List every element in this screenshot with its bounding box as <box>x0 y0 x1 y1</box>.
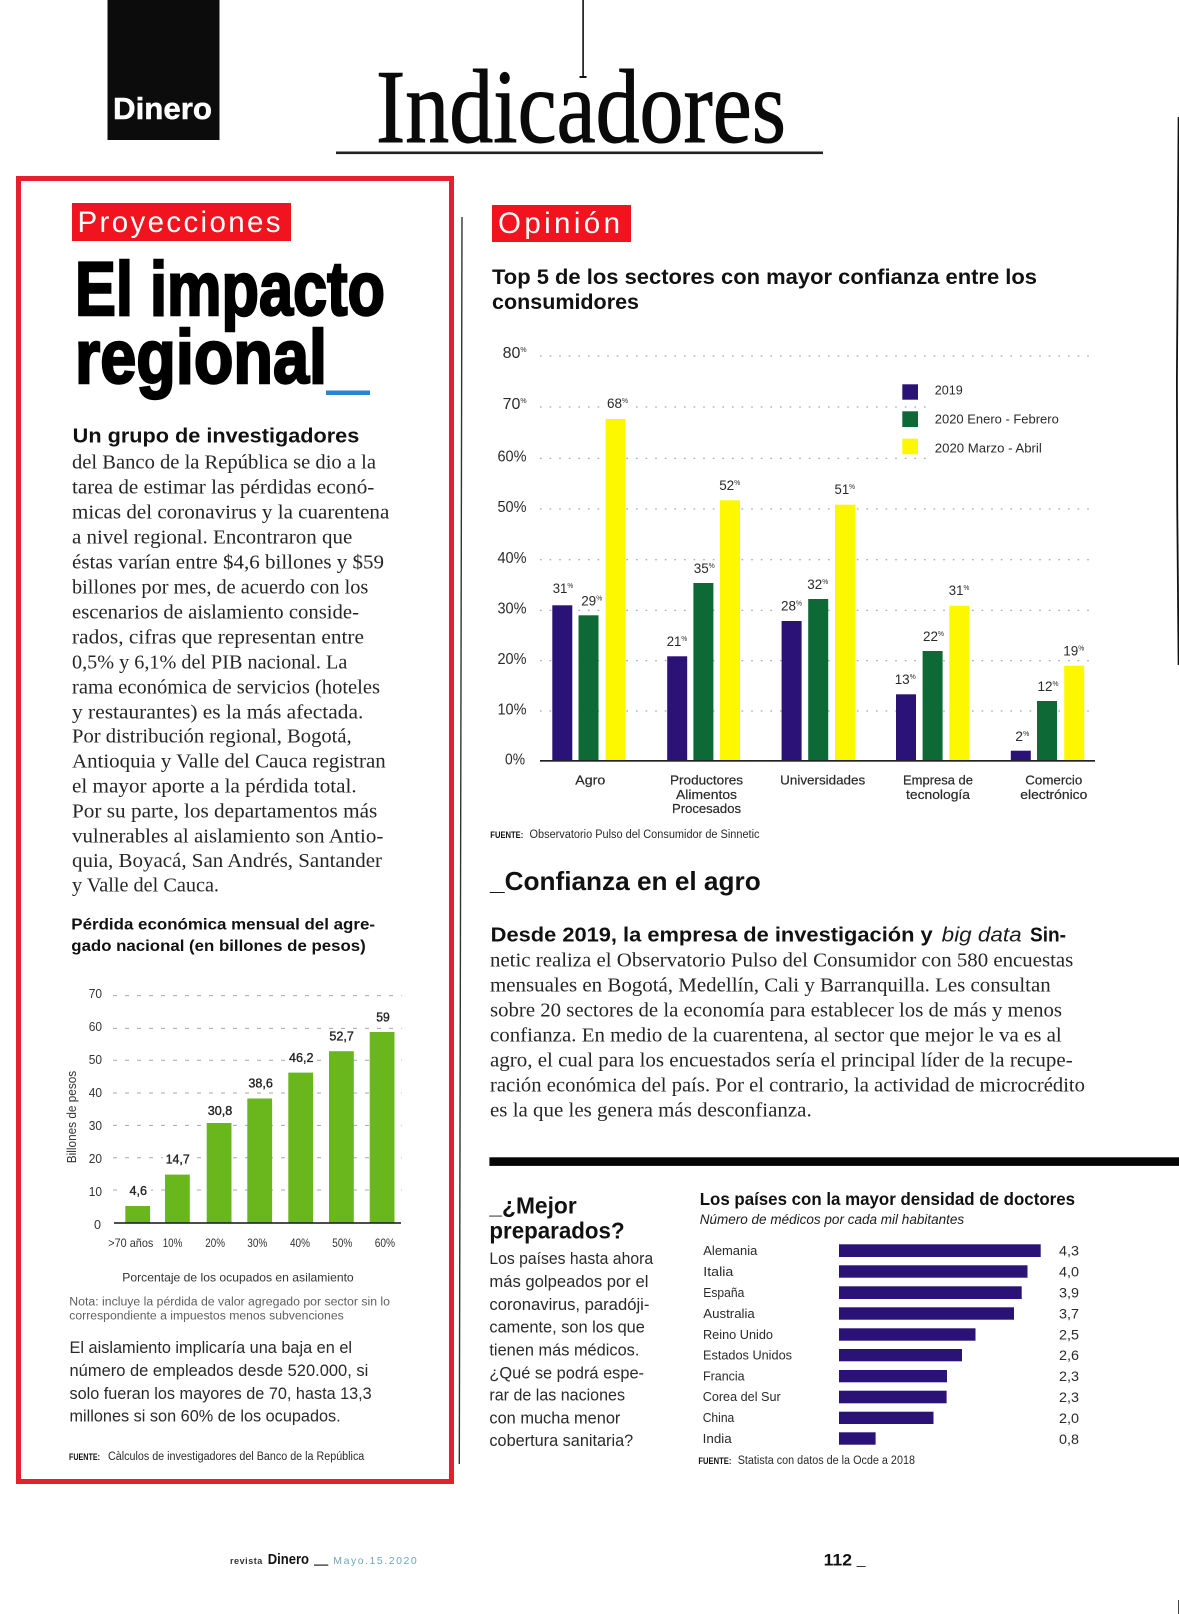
panel: El impacto regional <box>18 178 452 1482</box>
value labels: % <box>1078 646 1084 653</box>
values: 3,9 <box>1059 1284 1079 1300</box>
value labels: 19 <box>1063 643 1079 659</box>
x axis labels: >70 años <box>108 1236 153 1250</box>
bars: 2020 Marzo - Abril <box>606 419 1084 761</box>
page number: 112 <box>824 1551 852 1570</box>
y axis labels <box>89 986 102 1232</box>
body text: Confianza: es la que les genera más desconfianza. <box>490 1101 812 1122</box>
values: 2,6 <box>1059 1347 1079 1363</box>
y axis labels: 10% <box>498 702 526 718</box>
body text: regional losses: micas del coronavirus y la cuarentena <box>72 502 390 523</box>
body text: regional losses: Por distribución regional, Bogotá, <box>72 727 352 748</box>
value labels: 32 <box>807 576 823 592</box>
category labels: electrónico <box>1020 787 1087 802</box>
value labels: 21 <box>667 633 682 649</box>
x axis title: Porcentaje de los ocupados en asilamiento <box>122 1271 354 1285</box>
y axis labels: 20% <box>498 651 526 668</box>
body text: regional losses: rados, cifras que representan entre <box>72 627 364 648</box>
value labels: 2 <box>1015 728 1023 744</box>
value labels: % <box>963 585 969 592</box>
body text: regional losses: tarea de estimar las pérdidas econó- <box>72 477 374 498</box>
y axis labels: 10 <box>89 1184 102 1199</box>
value labels: 46,2 <box>289 1051 314 1065</box>
bar chart: monthly loss <box>65 986 402 1285</box>
value labels: 12 <box>1038 678 1053 694</box>
chart heading: Número de médicos por cada mil habitantes <box>700 1212 964 1227</box>
y axis labels: 80 <box>503 345 520 362</box>
bars: 2019 <box>552 605 1031 761</box>
y axis labels: 60% <box>498 448 526 466</box>
heading: preparados? <box>489 1217 625 1243</box>
value labels: % <box>1052 681 1058 688</box>
value labels: 52,7 <box>329 1030 354 1044</box>
country labels: China <box>703 1410 735 1425</box>
body text <box>489 1250 654 1450</box>
values: 4,3 <box>1059 1242 1079 1258</box>
y axis labels: % <box>520 398 527 405</box>
source: FUENTE: <box>69 1452 100 1462</box>
value labels: 22 <box>923 628 939 644</box>
body text: regional losses: Antioquia y Valle del Cauca registran <box>72 752 386 773</box>
country labels: Estados Unidos <box>703 1348 792 1363</box>
chart heading <box>700 1189 1075 1227</box>
source: Statista con datos de la Ocde a 2018 <box>738 1455 915 1467</box>
x axis labels: 10% <box>163 1236 183 1250</box>
y axis labels: 0% <box>505 752 525 768</box>
x axis labels <box>108 1236 395 1250</box>
section divider bar <box>489 1157 1179 1166</box>
category labels: tecnología <box>906 787 971 802</box>
category labels <box>575 772 1087 816</box>
legend: 2020 Marzo - Abril <box>935 440 1042 456</box>
category labels: Productores <box>670 772 744 787</box>
heading: _¿Mejor <box>488 1192 577 1218</box>
y axis labels: 40% <box>498 550 526 567</box>
y axis labels: 30 <box>89 1118 102 1133</box>
body text: Confianza: sobre 20 sectores de la economía para establecer los de más y menos <box>490 1001 1062 1022</box>
category labels: Agro <box>575 772 605 787</box>
panel: Mejor preparados <box>488 1192 654 1450</box>
body text: Los países hasta ahora <box>489 1250 654 1268</box>
body text: camente, son los que <box>489 1319 645 1337</box>
country labels: Alemania <box>703 1243 758 1258</box>
body text: regional losses: 0,5% y 6,1% del PIB nacional. La <box>72 652 348 673</box>
chart heading: Pérdida económica mensual del agre- <box>71 917 375 934</box>
values <box>1059 1242 1079 1447</box>
body text: regional losses: escenarios de aislamiento conside- <box>72 602 359 623</box>
value labels: 31 <box>949 582 964 598</box>
country labels: Reino Unido <box>703 1327 773 1342</box>
value labels: % <box>849 484 855 491</box>
body text: regional losses <box>72 425 390 897</box>
values: 4,0 <box>1059 1264 1079 1280</box>
note <box>69 1296 390 1322</box>
y axis labels: 40 <box>89 1085 102 1100</box>
y axis labels: 0 <box>94 1217 101 1232</box>
body text: Confianza <box>490 925 1085 1122</box>
bars <box>125 1032 395 1223</box>
value labels: 13 <box>895 671 910 687</box>
value labels: % <box>938 631 944 638</box>
value labels: % <box>622 398 628 405</box>
value labels: 59 <box>376 1011 390 1025</box>
y axis title: Billones de pesos <box>65 1071 79 1163</box>
body text: tienen más médicos. <box>489 1341 639 1359</box>
body text: regional losses: y Valle del Cauca. <box>72 876 219 897</box>
value labels: % <box>734 480 740 487</box>
source: Observatorio Pulso del Consumidor de Sinnetic <box>530 829 760 841</box>
country labels: Italia <box>703 1264 734 1279</box>
value labels: 28 <box>781 598 797 614</box>
category labels: Alimentos <box>676 787 738 802</box>
tag: Opinión: Opinión <box>498 207 620 240</box>
value labels: % <box>709 563 715 570</box>
body text: coronavirus, paradóji- <box>489 1296 649 1314</box>
values: 2,0 <box>1059 1410 1079 1426</box>
masthead <box>108 0 823 165</box>
values: 0,8 <box>1059 1431 1079 1447</box>
y axis labels: 70 <box>503 396 520 413</box>
heading: Confianza en el agro: _Confianza en el agro <box>489 866 761 896</box>
x axis labels: 60% <box>375 1236 395 1250</box>
legend: 2020 Enero - Febrero <box>935 412 1059 426</box>
value labels: 51 <box>834 481 850 497</box>
values: 2,3 <box>1059 1389 1079 1405</box>
y axis labels <box>498 345 527 768</box>
value labels: % <box>796 601 802 608</box>
body text: con mucha menor <box>489 1409 621 1427</box>
country labels: India <box>703 1431 732 1446</box>
chart heading: gado nacional (en billones de pesos) <box>71 938 366 955</box>
x axis labels: 40% <box>290 1236 310 1250</box>
bars <box>839 1244 1041 1445</box>
value labels: 31 <box>553 580 568 596</box>
page number <box>824 1551 866 1570</box>
value labels: 4,6 <box>130 1184 147 1198</box>
horizontal bar chart <box>703 1242 1079 1447</box>
column divider <box>459 217 462 1464</box>
y axis labels: 50% <box>498 499 526 516</box>
value labels: % <box>1023 731 1029 738</box>
body text: Confianza: confianza. En medio de la cuarentena, al sector que mejor le va es al <box>490 1026 1062 1047</box>
publication line: revista <box>230 1556 263 1566</box>
x axis labels: 50% <box>332 1236 353 1250</box>
chart heading <box>492 266 1037 314</box>
body text: Confianza: big data <box>942 925 1022 947</box>
chart heading: Top 5 de los sectores con mayor confianza entre los <box>492 266 1037 289</box>
note: Nota: incluye la pérdida de valor agregado por sector sin lo <box>69 1296 390 1308</box>
value labels: 35 <box>694 560 709 576</box>
body text: regional losses: éstas varían entre $4,6 billones y $59 <box>72 552 384 573</box>
section tab: Dinero <box>108 0 220 140</box>
category labels: Universidades <box>780 772 866 787</box>
value labels: 14,7 <box>166 1153 190 1167</box>
source: FUENTE: <box>490 830 523 840</box>
value labels: 52 <box>719 477 735 493</box>
value labels: % <box>681 636 687 643</box>
body text: regional losses: el mayor aporte a la pérdida total. <box>72 777 357 798</box>
legend: 2019 <box>935 382 963 397</box>
country labels: Australia <box>703 1306 756 1321</box>
body text: Confianza: netic realiza el Observatorio Pulso del Consumidor con 580 encuestas <box>490 951 1073 972</box>
values: 2,3 <box>1059 1368 1079 1384</box>
body text: rar de las naciones <box>489 1387 625 1405</box>
chart heading <box>71 917 375 955</box>
publication line: Mayo.15.2020 <box>333 1555 417 1567</box>
y axis labels: 70 <box>89 986 102 1001</box>
heading <box>75 247 385 400</box>
value labels: % <box>910 674 916 681</box>
value labels: 29 <box>581 593 597 609</box>
x axis labels: 20% <box>205 1236 225 1250</box>
y axis labels: 60 <box>89 1019 102 1034</box>
body text: regional losses: rama económica de servicios (hoteles <box>72 677 380 698</box>
body text: más golpeados por el <box>489 1273 648 1291</box>
text block: employment: solo fueran los mayores de 70, hasta 13,3 <box>70 1385 372 1403</box>
x axis labels: 30% <box>247 1236 268 1250</box>
body text: regional losses: del Banco de la República se dio a la <box>72 452 376 473</box>
body text: regional losses: Por su parte, los departamentos más <box>72 801 377 822</box>
text block: employment: número de empleados desde 520.000, si <box>70 1362 368 1380</box>
y axis labels: 30% <box>498 600 526 618</box>
body text: regional losses: quia, Boyacá, San Andrés, Santander <box>72 851 383 872</box>
source: Càlculos de investigadores del Banco de la República <box>108 1451 365 1463</box>
body text: regional losses: y restaurantes) es la más afectada. <box>72 702 363 723</box>
note: correspondiente a impuestos menos subvenciones <box>69 1310 344 1322</box>
y axis labels: 20 <box>89 1151 102 1166</box>
body text: regional losses: a nivel regional. Encontraron que <box>72 527 352 548</box>
y axis labels: % <box>520 347 527 354</box>
panel: Opinión <box>230 117 1179 1614</box>
section tab: Dinero: Dinero <box>113 91 212 126</box>
category labels: Comercio <box>1025 772 1082 787</box>
values: 2,5 <box>1059 1326 1079 1342</box>
value labels: % <box>596 596 602 603</box>
body text: Confianza: agro, el cual para los encuestados sería el principal líder de la recupe- <box>490 1051 1073 1072</box>
heading: regional <box>75 315 327 400</box>
chart heading: consumidores <box>492 291 639 314</box>
country labels: España <box>703 1285 745 1300</box>
bars: 2020 Enero - Febrero <box>578 583 1057 761</box>
value labels: % <box>822 579 828 586</box>
values: 3,7 <box>1059 1306 1079 1322</box>
y axis labels: 50 <box>89 1052 102 1067</box>
source: FUENTE: <box>698 1456 731 1466</box>
body text: regional losses: vulnerables al aislamiento son Antio- <box>72 826 383 847</box>
body text: cobertura sanitaria? <box>489 1432 633 1450</box>
country labels <box>703 1243 792 1446</box>
text block: employment: millones si son 60% de los ocupados. <box>70 1407 341 1425</box>
footer <box>230 1551 866 1570</box>
category labels: Procesados <box>672 801 741 816</box>
legend <box>902 382 1059 456</box>
publication line <box>230 1552 417 1568</box>
value labels: 30,8 <box>208 1104 232 1118</box>
tag: Proyecciones: Proyecciones <box>78 206 280 239</box>
body text: regional losses: Un grupo de investigadores <box>73 425 359 448</box>
category labels: Empresa de <box>903 772 973 787</box>
title: Indicadores <box>376 48 786 165</box>
heading <box>488 1192 625 1243</box>
body text: Confianza: Desde 2019, la empresa de investigación y <box>491 925 934 947</box>
value labels: 38,6 <box>248 1077 273 1091</box>
country labels: Corea del Sur <box>703 1389 781 1404</box>
value labels <box>130 1011 390 1198</box>
panel: doctor density <box>698 1189 1079 1467</box>
body text: Confianza: ración económica del país. Por el contrario, la actividad de microcrédito <box>490 1076 1085 1097</box>
publication line: Dinero <box>268 1552 309 1568</box>
chart heading: Los países con la mayor densidad de doctores <box>700 1189 1075 1209</box>
country labels: Francia <box>703 1368 745 1383</box>
text block: employment: El aislamiento implicaría una baja en el <box>70 1339 352 1357</box>
body text: ¿Qué se podrá espe- <box>489 1364 644 1382</box>
value labels: % <box>567 583 573 590</box>
heading: El impacto <box>75 247 385 332</box>
body text: Confianza: mensuales en Bogotá, Medellín, Cali y Barranquilla. Les consultan <box>490 976 1051 997</box>
grouped bar chart <box>489 345 1095 1122</box>
body text: Confianza: Sin- <box>1030 925 1066 947</box>
value labels: 68 <box>607 395 623 411</box>
value labels <box>553 395 1084 744</box>
text block: employment <box>70 1339 372 1425</box>
page edge shadow <box>1177 117 1179 665</box>
body text: regional losses: billones por mes, de acuerdo con los <box>72 577 368 598</box>
